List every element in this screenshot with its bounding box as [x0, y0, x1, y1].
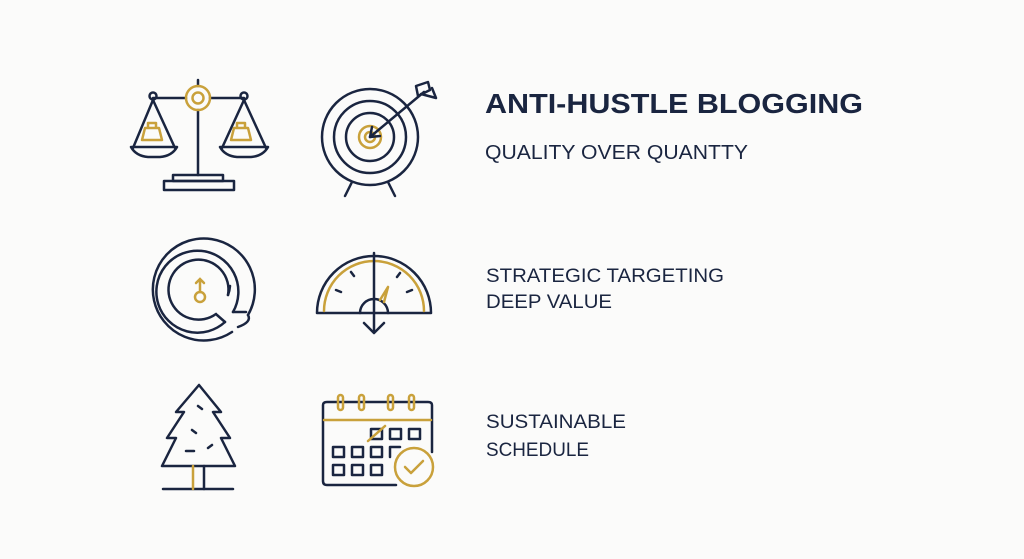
icon: target with arrow: [322, 82, 436, 196]
icon: balance scale: [131, 80, 268, 190]
text: deep value: DEEP VALUE: [486, 292, 612, 313]
subtitle: QUALITY OVER QUANTTY: [485, 142, 748, 164]
text: strategic targeting: STRATEGIC TARGETING: [486, 266, 724, 287]
text: schedule: SCHEDULE: [486, 440, 589, 461]
icon: calendar with check: [323, 395, 433, 486]
title: ANTI-HUSTLE BLOGGING: [485, 88, 863, 119]
text: sustainable: SUSTAINABLE: [486, 412, 626, 433]
icon: gauge: [317, 253, 431, 333]
icon: maze: [153, 238, 255, 340]
icon: tree: [162, 385, 235, 489]
